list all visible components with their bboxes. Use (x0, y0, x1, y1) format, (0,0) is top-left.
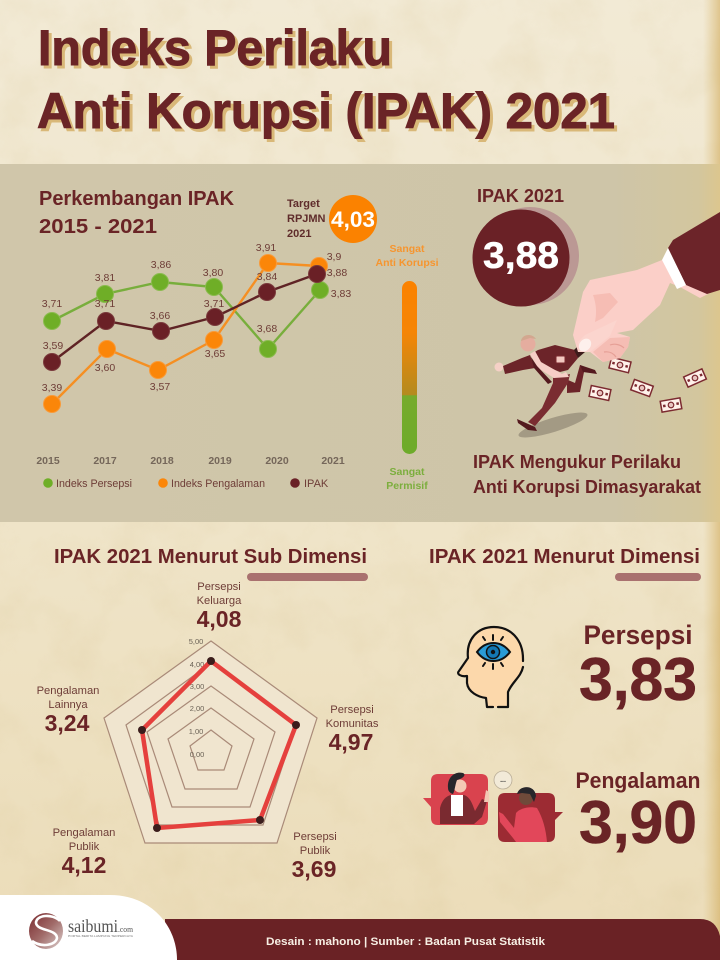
radar axis labels: 4,00 (190, 660, 204, 669)
radar axis labels: 1,00 (189, 727, 203, 736)
scale: Sangat Anti Korupsi to Sangat Permisif (376, 243, 439, 492)
IPAK 2021 badge: 3,88 (483, 235, 559, 276)
series: IPAK: 3,59 (43, 340, 63, 352)
footer band (165, 919, 720, 960)
title: Anti Korupsi (IPAK) 2021 (37, 83, 615, 139)
label: Pengalaman Publik: Pengalaman (53, 827, 115, 839)
label: Persepsi Publik: Persepsi (293, 831, 337, 843)
caption: IPAK measures behaviour: Anti Korupsi Dimasyarakat (473, 477, 701, 497)
label: Persepsi Keluarga (197, 581, 242, 632)
radar data polygon (138, 657, 300, 832)
icon: falling money bills (589, 357, 706, 412)
stat: Pengalaman: Pengalaman (576, 768, 700, 793)
caption: IPAK measures behaviour: IPAK Mengukur Perilaku (473, 452, 681, 472)
target RPJMN callout: RPJMN (287, 213, 326, 225)
scale: Sangat Anti Korupsi to Sangat Permisif: Anti Korupsi (376, 257, 439, 269)
x axis years: 2017 (93, 455, 117, 467)
label: Persepsi Komunitas: Komunitas (326, 718, 379, 730)
series: Indeks Persepsi (42, 259, 351, 358)
target RPJMN callout: Target (287, 198, 320, 210)
icon: two people talking (423, 771, 563, 842)
scale: Sangat Anti Korupsi to Sangat Permisif: Sangat (389, 243, 425, 255)
scale: Sangat Anti Korupsi to Sangat Permisif: Sangat (389, 466, 425, 478)
heading: Perkembangan IPAK: 2015 - 2021 (39, 216, 157, 238)
stat: Pengalaman: 3,90 (579, 789, 697, 856)
label: Persepsi Publik (292, 831, 337, 882)
chart legend: Indeks Pengalaman (171, 478, 265, 490)
label: Pengalaman Lainnya: 3,24 (45, 710, 90, 736)
title: Indeks Perilaku (41, 23, 395, 79)
label: Pengalaman Lainnya (37, 685, 99, 736)
logo panel: saibumi.com (0, 895, 177, 960)
chart legend: Indeks Persepsi (56, 478, 132, 490)
label: Persepsi Keluarga: 4,08 (197, 606, 242, 632)
heading: Sub Dimensi (54, 546, 368, 581)
icon: logo S (29, 913, 63, 949)
label: Persepsi Publik: 3,69 (292, 856, 336, 882)
series: IPAK: 3,71 (204, 298, 224, 310)
series: Indeks Pengalaman: 3,60 (95, 362, 115, 374)
x axis years: 2015 (36, 455, 60, 467)
series: IPAK: 3,88 (327, 267, 347, 279)
illustration: hand grabbing fleeing corrupt man (494, 212, 720, 442)
heading: Sub Dimensi: IPAK 2021 Menurut Sub Dimensi (54, 546, 367, 568)
left speech panel (423, 773, 489, 825)
series: Indeks Persepsi: 3,83 (331, 288, 351, 300)
shadow of runner (517, 408, 589, 442)
logo panel: saibumi.com: .com (118, 925, 134, 934)
radar axis labels: 0,00 (190, 750, 204, 759)
label: Pengalaman Publik (53, 827, 115, 878)
x axis years: 2018 (150, 455, 174, 467)
right speech panel (498, 787, 563, 842)
x axis years (36, 455, 345, 467)
label: Pengalaman Lainnya: Lainnya (48, 699, 88, 711)
series: Indeks Persepsi: 3,71 (42, 298, 62, 310)
label: Persepsi Komunitas: Persepsi (330, 704, 374, 716)
radar axis labels: 2,00 (190, 704, 204, 713)
label: Persepsi Keluarga: Keluarga (197, 595, 242, 607)
logo panel: saibumi.com: PORTAL BERITA LAMPUNG TERPERCAYA (68, 934, 133, 938)
x axis years: 2021 (321, 455, 345, 467)
target RPJMN callout: 2021 (287, 228, 311, 240)
icon: running man (494, 335, 597, 431)
series: Indeks Persepsi: 3,86 (151, 259, 171, 271)
label: Pengalaman Publik: Publik (69, 841, 100, 853)
label: Pengalaman Lainnya: Pengalaman (37, 685, 99, 697)
label: Persepsi Keluarga: Persepsi (197, 581, 241, 593)
icon: head with eye (458, 627, 523, 707)
stat: Persepsi: Persepsi (584, 620, 692, 650)
target RPJMN callout: 4,03 (331, 207, 375, 232)
radar axis labels: 3,00 (190, 682, 204, 691)
heading: Perkembangan IPAK: Perkembangan IPAK (39, 188, 235, 210)
label: Persepsi Komunitas: 4,97 (329, 729, 373, 755)
series: Indeks Pengalaman (42, 242, 341, 412)
title: Anti Korupsi (IPAK) 2021 (40, 86, 618, 142)
speech dots bubble: ... (500, 777, 506, 784)
logo panel: saibumi.com: saibumi (68, 916, 118, 936)
chart legend (43, 478, 329, 490)
series: Indeks Pengalaman: 3,65 (205, 348, 225, 360)
series: Indeks Pengalaman: 3,39 (42, 382, 62, 394)
line chart: IPAK 2015-2021 (36, 242, 351, 467)
series: IPAK: 3,71 (95, 298, 115, 310)
heading: Dimensi (429, 546, 701, 581)
stat: Persepsi: 3,83 (579, 646, 697, 713)
chart legend: IPAK (304, 478, 329, 490)
scale: Sangat Anti Korupsi to Sangat Permisif: Permisif (386, 480, 428, 492)
radar axis labels (189, 637, 204, 759)
series: Indeks Pengalaman: 3,9 (327, 251, 341, 263)
x axis years: 2020 (265, 455, 289, 467)
series: Indeks Pengalaman: 3,91 (256, 242, 276, 254)
IPAK 2021 badge (472, 186, 579, 306)
title (37, 20, 618, 142)
radar chart: sub dimensions (104, 637, 317, 843)
series: Indeks Pengalaman: 3,57 (150, 381, 170, 393)
series: Indeks Persepsi: 3,80 (203, 267, 223, 279)
icon: hand and sleeve (573, 212, 720, 362)
panel: IPAK trend and summary band (0, 164, 720, 522)
caption: IPAK measures behaviour (473, 452, 701, 497)
title: Indeks Perilaku (38, 20, 392, 76)
series: IPAK (43, 266, 347, 370)
heading: Perkembangan IPAK (39, 188, 235, 238)
label: Persepsi Publik: Publik (300, 845, 331, 857)
target RPJMN callout (287, 195, 377, 243)
label: Pengalaman Publik: 4,12 (62, 852, 106, 878)
heading: Dimensi: IPAK 2021 Menurut Dimensi (429, 546, 700, 568)
label: Persepsi Komunitas (326, 704, 379, 755)
series: IPAK: 3,84 (257, 271, 277, 283)
x axis years: 2019 (208, 455, 232, 467)
footer band: Desain : mahono | Sumber : Badan Pusat Statistik (266, 936, 546, 948)
radar axis labels: 5,00 (189, 637, 203, 646)
series: Indeks Persepsi: 3,81 (95, 272, 115, 284)
series: IPAK: 3,66 (150, 310, 170, 322)
series: Indeks Persepsi: 3,68 (257, 323, 277, 335)
IPAK 2021 badge: IPAK 2021 (477, 186, 564, 206)
